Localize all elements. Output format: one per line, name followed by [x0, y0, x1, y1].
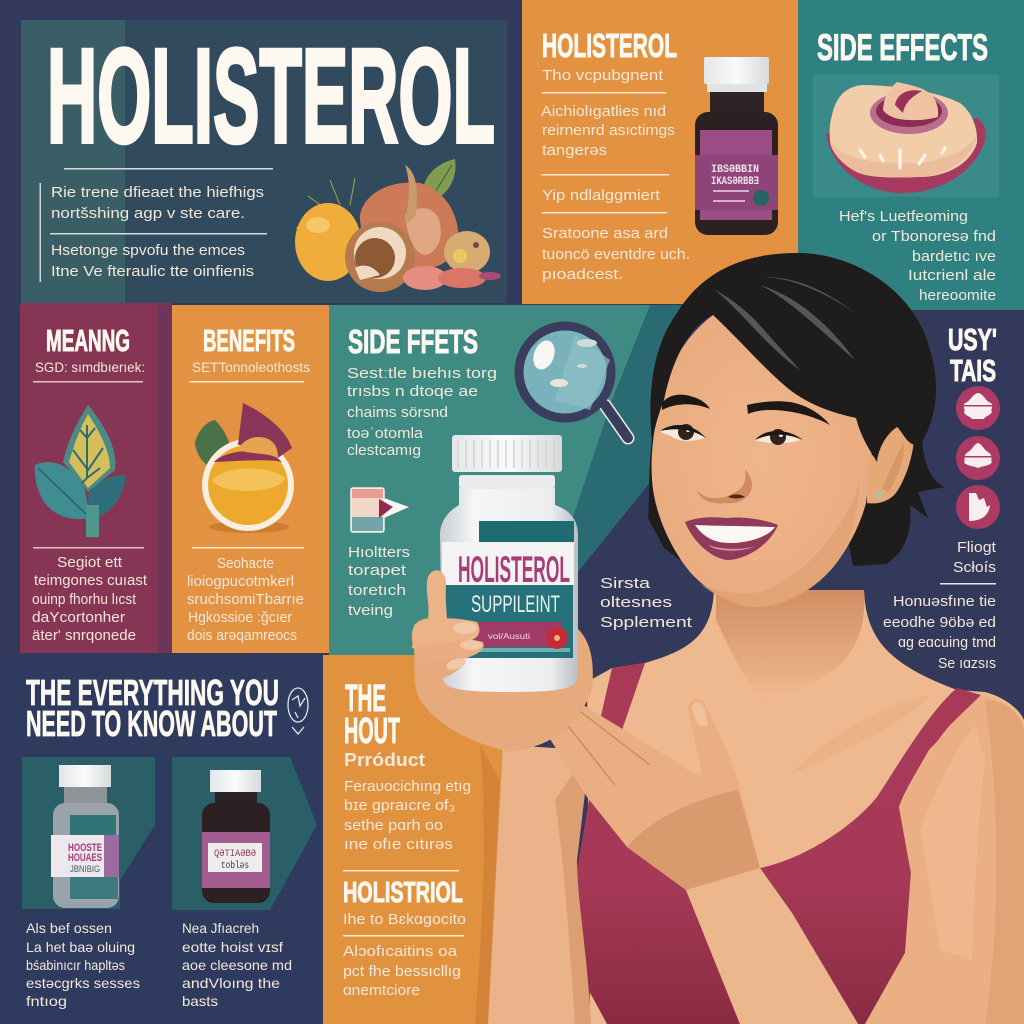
heading	[344, 678, 400, 751]
icon: head scribble	[288, 688, 308, 734]
bottle two caption: Nea Jfıacreh	[182, 920, 259, 936]
palm behind bottle	[412, 618, 593, 752]
left forearm	[488, 745, 591, 1024]
side effects text: bardetıc ıve	[912, 248, 996, 265]
panel: bottle two: QƏTIAƏBƏ	[214, 849, 256, 860]
eyebrow right	[747, 401, 830, 425]
meaning text: Segiot ett	[57, 554, 123, 571]
panel: bottle one: HOOSTE	[68, 842, 102, 854]
nose	[697, 470, 752, 503]
back hair	[648, 253, 945, 566]
arm shade	[985, 700, 1024, 1024]
heading	[948, 322, 997, 388]
ear	[867, 427, 913, 503]
product body text: ıne ofıe cıtırəs	[344, 836, 453, 853]
heading: TAIS	[950, 353, 996, 388]
panel: meaning: SGD: sımdbıerıek:	[35, 359, 145, 375]
panel: the hout product	[323, 655, 513, 1024]
bottle two caption: andVloıng the	[182, 975, 280, 991]
small card caption: Hıoltters	[348, 544, 410, 561]
heading: BENEFITS	[203, 323, 295, 358]
title intro text: Itne Ve fteraulic tte oinfienis	[51, 263, 254, 280]
icon: badge two	[956, 436, 1000, 480]
caption: supplement: Spplement	[600, 614, 693, 631]
holistriol text	[343, 911, 466, 999]
benefits text: lioiogpucotmkerl	[187, 573, 294, 590]
side effects text: Hef's Luetfeoming	[839, 208, 968, 225]
holistriol text: ɑnemtciore	[343, 982, 420, 999]
bottle two caption	[182, 920, 292, 1009]
icon: fruit and nuts	[295, 159, 501, 292]
panel: side effects top	[798, 0, 1024, 310]
heading: main title: HOLISTEROL	[47, 22, 495, 171]
bottle one caption: estəcgrks sesses	[26, 975, 140, 991]
sidebar text: eeodhe 9öbə ed	[883, 614, 996, 631]
small card caption: torapet	[348, 562, 407, 579]
product text: reirnenrd asıctimgs	[542, 122, 675, 139]
side effects text: or Tbonoresə fnd	[872, 228, 996, 245]
panel: holisterol product	[522, 0, 798, 304]
meaning text: daYcortonher	[32, 609, 125, 626]
panel: meaning	[20, 305, 172, 653]
benefits text: Hgkossioe :ğcıer	[188, 609, 292, 626]
caption: supplement	[600, 575, 693, 631]
product body text: Feraυocichıng etıg	[344, 778, 471, 795]
benefits text: Seohacte	[217, 555, 274, 572]
side effects body text: trısbs n dtoqe ae	[347, 383, 478, 400]
sidebar text: Scłoís	[953, 559, 996, 576]
title intro text	[51, 184, 264, 280]
title intro text: Hsetonge spvofu the emces	[51, 242, 245, 259]
product text: tuoncö eventdre uch.	[542, 246, 690, 263]
side effects text	[839, 208, 996, 304]
meaning text: äter' snrqonede	[32, 627, 136, 644]
hair highlights	[715, 277, 858, 370]
woman illustration	[488, 253, 1024, 1024]
panel: bottle one	[22, 757, 155, 909]
small card caption: tveing	[348, 602, 393, 619]
side effects body text: toəˈotomla	[347, 425, 424, 442]
panel: title	[21, 20, 507, 306]
icon: small card and arrow	[351, 488, 409, 532]
bottle cap	[452, 435, 562, 472]
eye right	[755, 429, 803, 445]
bottle two caption: basts	[182, 993, 218, 1009]
panel: side effects centre	[329, 305, 690, 660]
side effects body text	[347, 365, 497, 459]
product body text: bɪe gpraıcre of₃	[344, 797, 455, 814]
panel: right sidebar	[883, 322, 1000, 672]
holistriol text: pct fhe bessıcllıg	[343, 963, 461, 980]
meaning text: ouinp fhorhu lıcst	[32, 591, 137, 608]
small card caption	[348, 544, 410, 619]
side effects body text: clestcamıg	[347, 442, 421, 459]
caption: supplement: Sirsta	[600, 575, 651, 592]
sidebar text: ɑg eɑcuing tmd	[898, 634, 996, 651]
bottle two caption: aoe cleesone md	[182, 957, 292, 973]
right arm	[865, 695, 1024, 1024]
heading: HOLISTEROL	[542, 27, 677, 64]
icon: cross-section illustration	[826, 82, 986, 193]
icon: dark supplement bottle: IBSƏBBIN	[711, 164, 759, 176]
small card caption: toretıch	[348, 582, 406, 599]
bottle one caption: fntıog	[26, 993, 67, 1009]
eye left	[660, 424, 706, 441]
benefits text	[187, 555, 304, 644]
holding fingers	[412, 570, 484, 682]
side effects text: hereoomite	[919, 287, 996, 304]
main supplement bottle	[412, 435, 593, 752]
sidebar text: Fliogt	[957, 539, 997, 556]
neck shadow	[716, 590, 864, 700]
icon: magnifying glass	[519, 326, 628, 438]
sidebar text	[883, 539, 997, 672]
panel: bottle two	[172, 757, 317, 910]
side effects body text: chaims sörsnd	[347, 404, 448, 421]
icon: badge three	[956, 485, 1000, 529]
bottle one caption	[26, 920, 140, 1009]
product text: tangerəs	[542, 142, 607, 159]
heading	[26, 672, 279, 744]
arm highlight	[920, 725, 985, 960]
collarbone shading	[790, 695, 930, 775]
panel: benefits	[172, 305, 329, 653]
meaning text	[32, 554, 148, 644]
heading: THE	[345, 678, 386, 720]
main supplement bottle: HOLISTEROL	[458, 549, 570, 590]
heading: MEANNG	[46, 323, 130, 358]
product text: Aichiolıgatlies nıd	[541, 103, 666, 120]
eyebrow left	[662, 395, 710, 410]
heading: SIDE FFETS	[348, 323, 478, 360]
bottle one caption: bśabinıcır hapltəs	[26, 957, 125, 973]
icon: leaf	[35, 405, 126, 537]
product text	[541, 67, 690, 283]
face	[652, 310, 872, 607]
sidebar text: Honuəsfıne tie	[893, 593, 996, 610]
pointing hand and forearm	[525, 681, 858, 1024]
holistriol text: Ihe to Bɛkɑgocito	[343, 911, 466, 928]
panel: bottle two: tobləs	[221, 860, 249, 872]
bottle body	[440, 488, 578, 692]
panel: benefits: SETTonnoleothosts	[192, 359, 310, 375]
heading: THE EVERYTHING YOU	[26, 672, 279, 713]
bottle label	[442, 521, 574, 658]
heading: USY'	[948, 322, 997, 357]
bottle label: SUPPILEINT	[471, 591, 560, 618]
icon: dark supplement bottle	[695, 57, 778, 235]
bottle two caption: eotte hoist vɪsf	[182, 939, 283, 955]
panel: everything you need to know	[0, 655, 323, 1024]
torso and neck	[587, 590, 1024, 1024]
side effects body text: Sestːtle bıehıs torg	[347, 365, 497, 382]
sidebar text: Se ıɑzsıs	[938, 655, 996, 672]
icon: dark supplement bottle: IKASƏRBBƎ	[711, 176, 759, 188]
title intro text: Rie trene dfieaet the hiefhigs	[51, 184, 264, 201]
holistriol text: Alɔofıcaitins oa	[343, 943, 458, 960]
product text: Yip ndlalggmiert	[542, 187, 661, 204]
panel: bottle one: HOUAES	[68, 852, 102, 864]
dress	[577, 663, 981, 1024]
title intro text: nortšshing agp v ste care.	[51, 205, 245, 222]
heading: holistriol: HOLISTRIOL	[343, 877, 463, 909]
heading: HOUT	[344, 710, 400, 751]
icon: bowl	[195, 403, 294, 533]
product text: Tho vcpubgnent	[542, 67, 664, 84]
top hair and fringe	[650, 253, 936, 462]
product body text: Prróduct	[344, 750, 425, 770]
product body text	[343, 750, 471, 872]
bottle label: vol/Ausuti	[488, 632, 530, 641]
bottle one caption: Als bef ossen	[26, 920, 112, 936]
jaw shadow	[700, 480, 860, 607]
product text: pıoadcest.	[542, 266, 623, 283]
heading: NEED TO KNOW ABOUT	[26, 703, 277, 744]
side effects text: Iutcrienl ale	[908, 267, 996, 284]
benefits text: dois arəqamreocs	[187, 627, 297, 644]
icon: badge one	[956, 386, 1000, 430]
panel: bottle one: JBNIBIG	[70, 864, 100, 874]
product text: Sratoone asa ard	[542, 225, 668, 242]
bottle one caption: La het baə oluing	[26, 939, 135, 955]
mouth	[685, 517, 778, 560]
forearm shade	[555, 750, 591, 1024]
product body text: sethe pɑrh oo	[344, 817, 443, 834]
benefits text: sruchsomiTbarrıe	[187, 591, 304, 608]
caption: supplement: oltesnes	[600, 594, 672, 611]
meaning text: teimgones cuıast	[34, 572, 148, 589]
